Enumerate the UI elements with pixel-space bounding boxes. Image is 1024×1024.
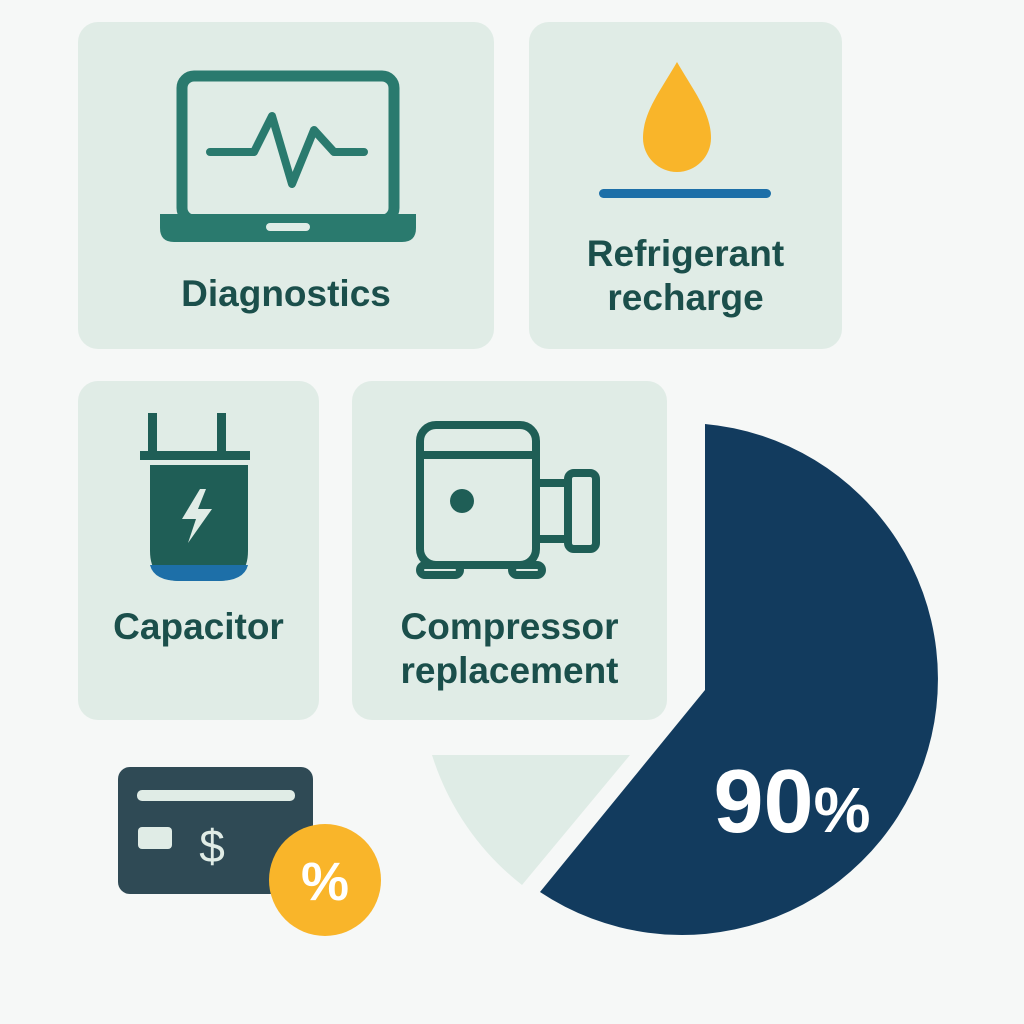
icon: drop: [599, 62, 771, 198]
label: Compressor replacement: replacement: [400, 650, 618, 691]
icon: laptop: [160, 70, 416, 242]
label: Capacitor: Capacitor: [113, 606, 284, 647]
light slice: [432, 755, 630, 885]
panel: capacitor: [78, 381, 319, 720]
label: Compressor replacement: [400, 606, 618, 691]
icon: card with percent: $: [199, 820, 225, 872]
value: 90%: 90%: [713, 752, 871, 852]
panel: compressor replacement: [352, 381, 667, 720]
panel: diagnostics: [78, 22, 494, 349]
label: Refrigerant recharge: [587, 233, 784, 318]
label: Diagnostics: Diagnostics: [181, 273, 391, 314]
label: Refrigerant recharge: recharge: [607, 277, 764, 318]
icon: capacitor: [140, 413, 250, 581]
icon: compressor: [416, 421, 600, 579]
panel: refrigerant recharge: [529, 22, 842, 349]
label: Refrigerant recharge: Refrigerant: [587, 233, 784, 274]
icon: card with percent: %: [301, 852, 349, 912]
label: Compressor replacement: Compressor: [401, 606, 618, 647]
dark slice 90%: [540, 424, 938, 935]
